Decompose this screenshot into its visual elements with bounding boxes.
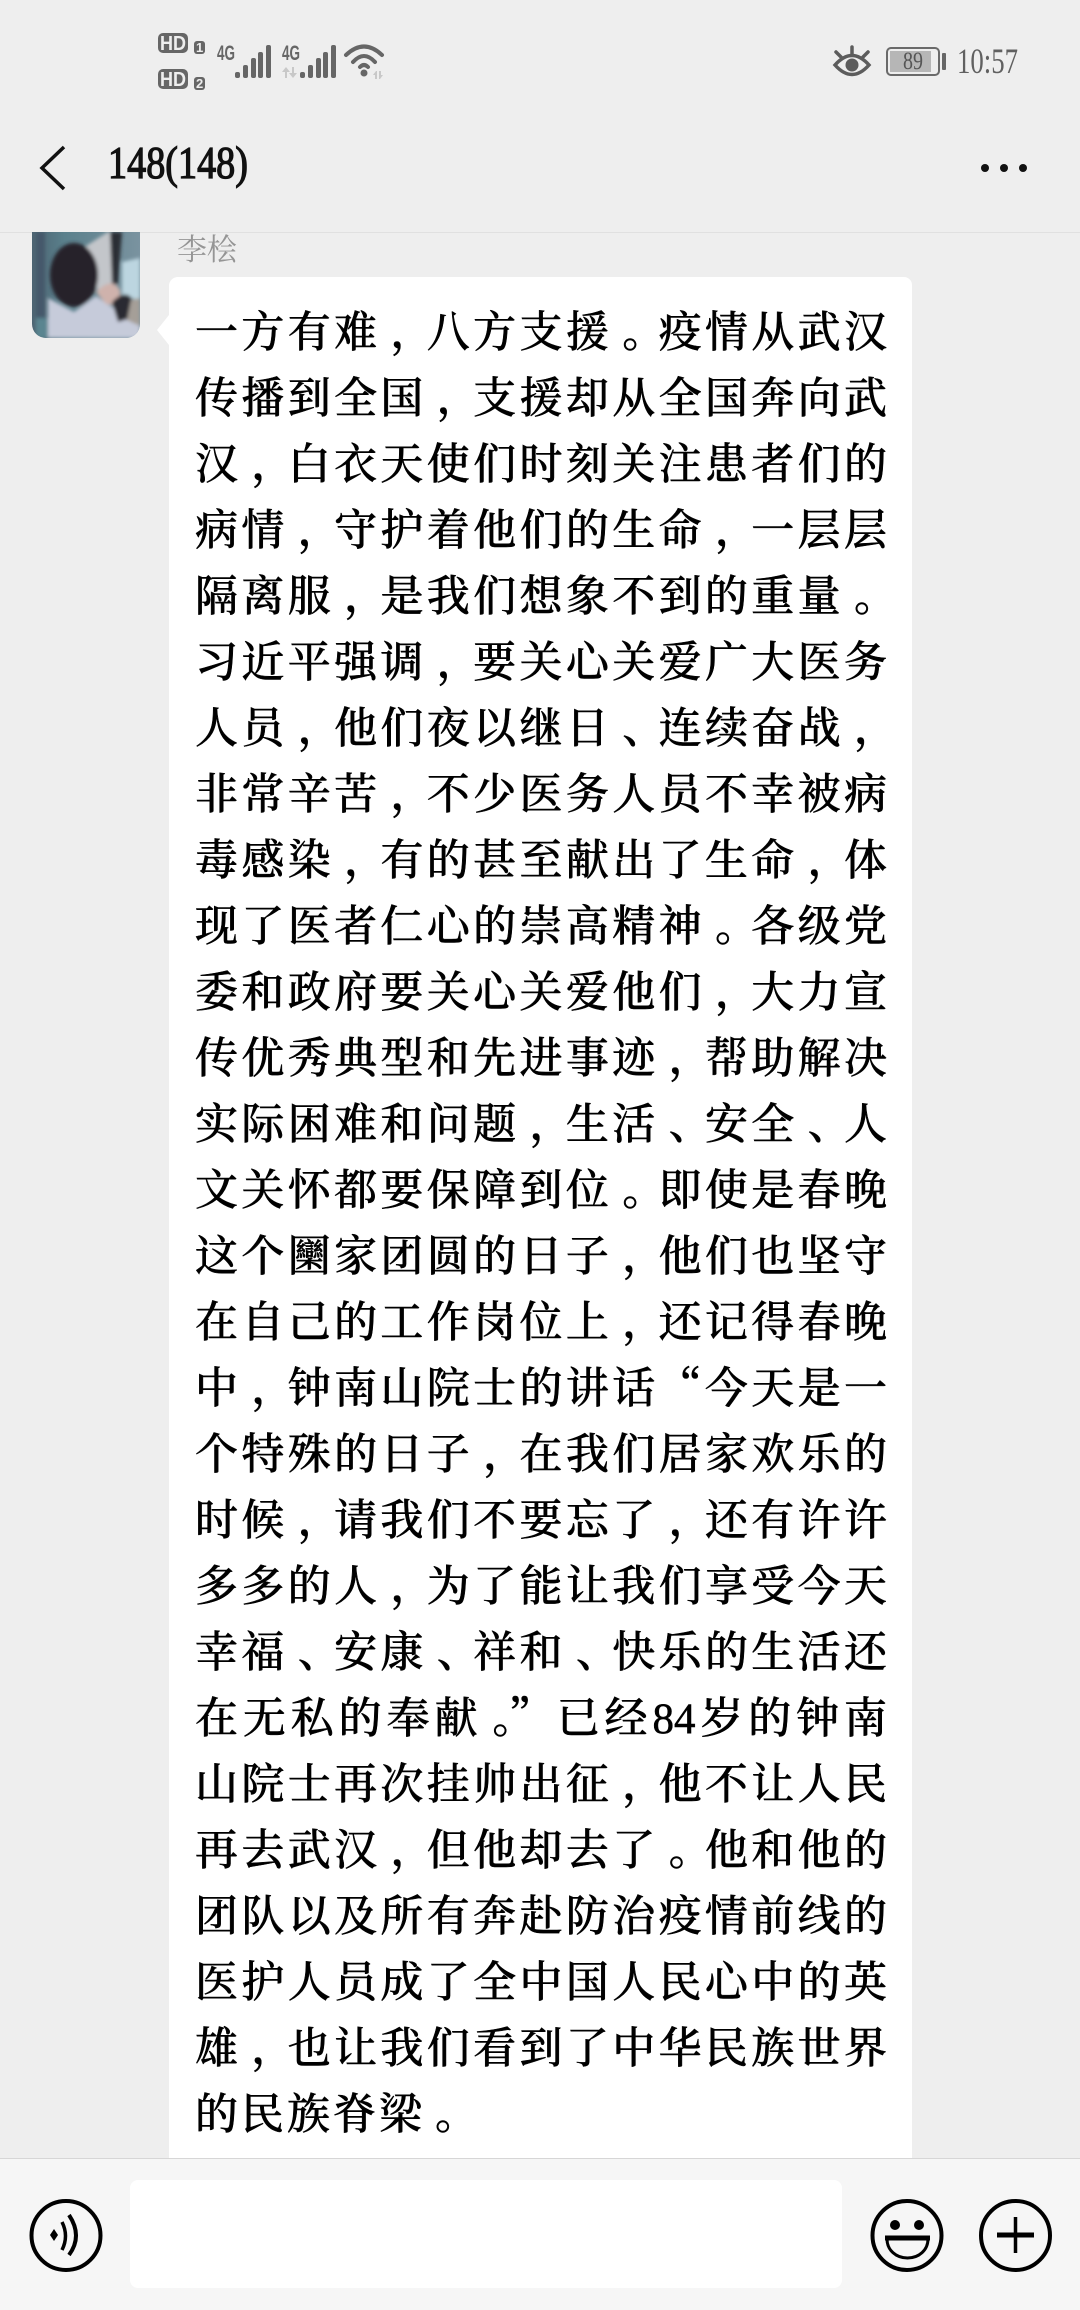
icon: wifi — [346, 46, 383, 79]
sender name: 李桧 — [177, 234, 237, 267]
icon: signal 2 — [282, 42, 336, 78]
text block: message body: 传优秀典型和先进事迹，帮助解决 — [195, 1036, 887, 1083]
text block: message body: 个特殊的日子，在我们居家欢乐的 — [195, 1432, 887, 1479]
text block: message body: 在无私的奉献。”已经84岁的钟南 — [195, 1685, 887, 1746]
text block: message body: 多多的人，为了能让我们享受今天 — [195, 1564, 887, 1611]
text block: message body: 委和政府要关心关爱他们，大力宣 — [195, 970, 887, 1017]
text block: message body: 现了医者仁心的崇高精神。各级党 — [195, 904, 887, 951]
text block: message body: 团队以及所有奔赴防治疫情前线的 — [195, 1894, 887, 1941]
text block: message body: 病情，守护着他们的生命，一层层 — [195, 508, 887, 555]
icon: signal 1: 4G — [217, 42, 235, 65]
icon: HD 1 badge — [158, 33, 205, 55]
text block: message body: 医护人员成了全中国人民心中的英 — [195, 1960, 887, 2007]
text block: message body: 传播到全国，支援却从全国奔向武 — [195, 376, 887, 423]
text block: message body: 一方有难，八方支援。疫情从武汉 — [195, 310, 887, 357]
clock: 10:57 — [957, 41, 1018, 81]
text input field — [130, 2180, 842, 2288]
text block: message body: 隔离服，是我们想象不到的重量。 — [195, 574, 897, 621]
text block: message body: 在自己的工作岗位上，还记得春晚 — [195, 1300, 887, 1347]
status bar icons — [158, 33, 1018, 91]
text block: message body: 这个圞家团圆的日子，他们也坚守 — [195, 1234, 887, 1281]
text block: message body: 文关怀都要保障到位。即使是春晚 — [195, 1168, 887, 1215]
bottom input bar — [0, 2158, 1080, 2310]
text block: message body: 非常辛苦，不少医务人员不幸被病 — [195, 772, 887, 819]
text block: message body: 中，钟南山院士的讲话“今天是一 — [195, 1355, 887, 1416]
chat title: 148(148) — [108, 137, 248, 188]
icon: HD 1 badge: 1 — [196, 40, 203, 55]
text block: message body: 人员，他们夜以继日、连续奋战， — [195, 706, 897, 753]
icon: eye comfort — [835, 47, 869, 74]
text block: message body — [195, 310, 897, 2139]
icon: emoji — [872, 2201, 942, 2270]
top header bar — [0, 0, 1080, 233]
text block: message body: 毒感染，有的甚至献出了生命，体 — [195, 838, 887, 885]
icon: signal 2: 4G — [282, 42, 300, 65]
icon: signal 1 — [217, 42, 271, 78]
panel: message bubble — [157, 277, 912, 2158]
icon: HD 2 badge: HD — [160, 69, 186, 91]
icon: sender avatar — [32, 232, 140, 338]
text block: message body: 时候，请我们不要忘了，还有许许 — [195, 1498, 887, 1545]
text block: message body: 实际困难和问题，生活、安全、人 — [195, 1102, 887, 1149]
icon: back arrow — [42, 147, 64, 189]
text block: message body: 汉，白衣天使们时刻关注患者们的 — [195, 442, 887, 489]
navigation bar — [40, 137, 1027, 190]
text block: message body: 幸福、安康、祥和、快乐的生活还 — [195, 1630, 887, 1677]
text block: message body: 习近平强调，要关心关爱广大医务 — [195, 640, 887, 687]
text block: message body: 再去武汉，但他却去了。他和他的 — [195, 1828, 887, 1875]
icon: plus — [981, 2201, 1050, 2270]
icon: battery: 89 — [903, 48, 923, 75]
icon: battery — [887, 48, 946, 75]
icon: HD 2 badge: 2 — [196, 76, 203, 91]
icon: HD 2 badge — [158, 69, 205, 91]
bubble background with tail — [157, 277, 912, 2158]
icon: voice — [32, 2201, 100, 2270]
bar icons — [30, 2199, 1052, 2272]
text block: message body: 的民族脊梁。 — [195, 2092, 481, 2139]
text block: message body: 雄，也让我们看到了中华民族世界 — [195, 2026, 887, 2073]
icon: more menu — [981, 164, 1027, 172]
text block: message body: 山院士再次挂帅出征，他不让人民 — [195, 1762, 887, 1809]
icon: HD 1 badge: HD — [160, 33, 186, 55]
